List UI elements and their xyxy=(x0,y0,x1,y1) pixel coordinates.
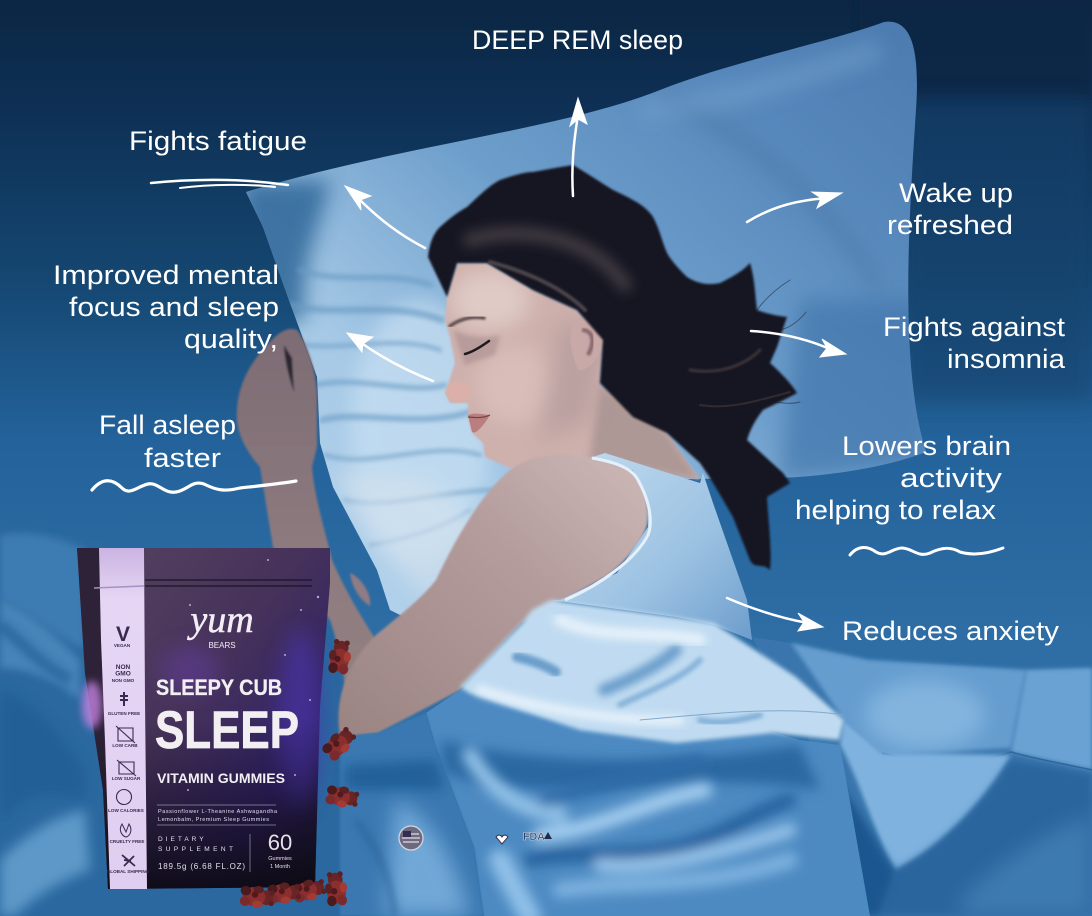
strip claims: GLOBAL SHIPPING xyxy=(107,869,150,874)
label: Wake up refreshed xyxy=(887,178,1013,240)
duvet xyxy=(426,600,870,916)
pale sheet detail by the pillow edge xyxy=(350,573,370,606)
label: Fights fatigue: Fights fatigue xyxy=(129,126,307,156)
underline scribble: Fights fatigue xyxy=(151,180,288,188)
ingredients and net weight: SUPPLEMENT xyxy=(158,846,233,853)
label: Lowers brain activity: activity xyxy=(900,463,1003,493)
label: Improved mental focus: focus and sleep xyxy=(69,292,279,322)
label: Lowers brain activity: helping to relax xyxy=(795,495,997,525)
lilac side strip xyxy=(99,548,147,889)
icon: USA badge xyxy=(399,826,423,850)
ingredients and net weight: 60 xyxy=(268,830,292,855)
ingredients and net weight xyxy=(157,805,292,872)
eye, brow and lips xyxy=(465,341,489,354)
strip claims: V xyxy=(116,623,130,646)
strip claims: LOW CALORIES xyxy=(108,808,144,813)
icon: FDA mark: FDA xyxy=(523,831,545,843)
strip claims xyxy=(107,623,150,874)
under sheet center left xyxy=(340,713,484,916)
strip claims: LOW SUGAR xyxy=(112,776,141,781)
strip claims: CRUELTY FREE xyxy=(110,839,144,844)
heading: DEEP REM sleep: DEEP REM sleep xyxy=(472,25,683,55)
label: Improved mental focus: quality, xyxy=(184,324,278,354)
woman: shoulder and upper arm xyxy=(338,455,648,737)
product pouch xyxy=(77,548,330,889)
woman: tank top xyxy=(551,453,752,640)
under sheet left xyxy=(0,531,360,916)
arrow: upper right xyxy=(747,192,842,222)
underline wave: Fall asleep faster xyxy=(92,481,296,492)
duvet lower folds xyxy=(470,755,790,916)
product title: SLEEPY CUB xyxy=(156,675,282,700)
woman: hair xyxy=(428,165,806,570)
ingredients and net weight: 1 Month xyxy=(270,864,290,870)
brand logo: yum xyxy=(186,599,254,641)
label: Improved mental focus xyxy=(53,260,279,354)
label: Lowers brain activity xyxy=(795,431,1011,525)
label: Wake up refreshed: Wake up xyxy=(899,178,1013,208)
pillow wrinkles xyxy=(290,270,500,545)
strip claims: NON xyxy=(116,664,131,671)
strip claims: LOW CARB xyxy=(112,743,138,748)
pillow xyxy=(240,15,940,625)
arrow: bottom right xyxy=(727,598,823,631)
underline wave: Lowers brain activity xyxy=(850,547,1003,555)
under sheet and duvet flap right xyxy=(752,637,1092,916)
label: Wake up refreshed: refreshed xyxy=(887,210,1013,240)
arrow: up xyxy=(570,98,587,196)
strip claims: GMO xyxy=(115,670,131,678)
arrow: lower right xyxy=(751,331,846,357)
woman: face and neck xyxy=(445,263,700,480)
label: Fall asleep faster: faster xyxy=(144,443,221,473)
label: Fights against insomnia xyxy=(883,312,1066,374)
label: Fall asleep faster xyxy=(99,410,236,473)
strip claims: NON GMO xyxy=(112,678,135,683)
woman: far arm and hand xyxy=(237,329,376,735)
ingredients and net weight: 189.5g (6.68 FL.OZ) xyxy=(158,862,245,871)
label: Fights against insomnia: Fights against xyxy=(883,312,1066,342)
duvet upper fold xyxy=(460,600,844,743)
product title xyxy=(155,675,299,786)
ingredients and net weight: Passionflower L-Theanine Ashwagandha xyxy=(158,809,278,815)
arrow: lower left xyxy=(347,333,433,381)
duvet shadow under the fold xyxy=(440,740,820,790)
label: Fights against insomnia: insomnia xyxy=(947,344,1066,374)
ingredients and net weight: Lemonbalm, Premium Sleep Gummies xyxy=(158,817,269,823)
product title: VITAMIN GUMMIES xyxy=(157,770,285,786)
icon: heart badge xyxy=(496,835,508,844)
strip claims: GLUTEN FREE xyxy=(108,711,140,716)
label: Lowers brain activity: Lowers brain xyxy=(842,431,1011,461)
label: Fall asleep faster: Fall asleep xyxy=(99,410,236,440)
gummy bears xyxy=(239,638,360,909)
ingredients and net weight: DIETARY xyxy=(158,836,207,843)
strip claims: VEGAN xyxy=(114,643,131,648)
label: Reduces anxiety: Reduces anxiety xyxy=(842,616,1060,646)
ingredients and net weight: Gummies xyxy=(268,856,292,862)
ear xyxy=(570,317,603,370)
brand logo: BEARS xyxy=(208,641,236,650)
product title: SLEEP xyxy=(155,701,299,760)
label: Improved mental focus: Improved mental xyxy=(53,260,279,290)
sparkles xyxy=(187,559,319,791)
arrow: upper left xyxy=(345,186,425,248)
